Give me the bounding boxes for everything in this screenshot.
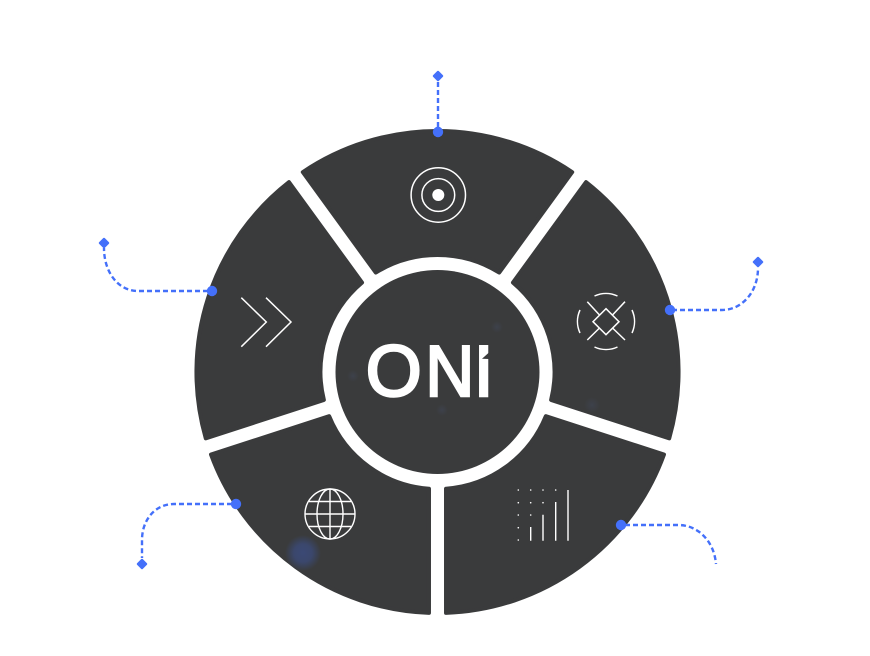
icon: bar chart with dots — [518, 489, 568, 541]
connector: bottom right — [616, 520, 716, 564]
connector: bottom left — [136, 499, 241, 570]
icon: target — [411, 168, 465, 222]
segment: left — [167, 169, 385, 469]
logo: ONI: N — [425, 331, 474, 411]
icon: double chevron — [241, 298, 291, 347]
wheel — [167, 131, 708, 646]
icon: diamond with crossed lines and arcs — [577, 293, 635, 350]
segment: right — [490, 169, 708, 469]
logo: ONI: I — [474, 332, 494, 412]
faint specks — [347, 321, 600, 416]
segment: top — [303, 131, 572, 273]
infographic: ONI wheel — [98, 70, 764, 615]
center circle — [336, 270, 540, 474]
blue glow on lower left segment — [286, 536, 320, 570]
segment: bottom right — [387, 373, 688, 646]
connector: top — [432, 70, 444, 137]
connector: left — [98, 237, 217, 296]
icon: globe — [305, 489, 355, 539]
segment: bottom left — [187, 373, 488, 646]
connector: right — [665, 256, 764, 315]
logo: ONI — [366, 331, 494, 412]
logo: ONI: O — [366, 332, 422, 412]
